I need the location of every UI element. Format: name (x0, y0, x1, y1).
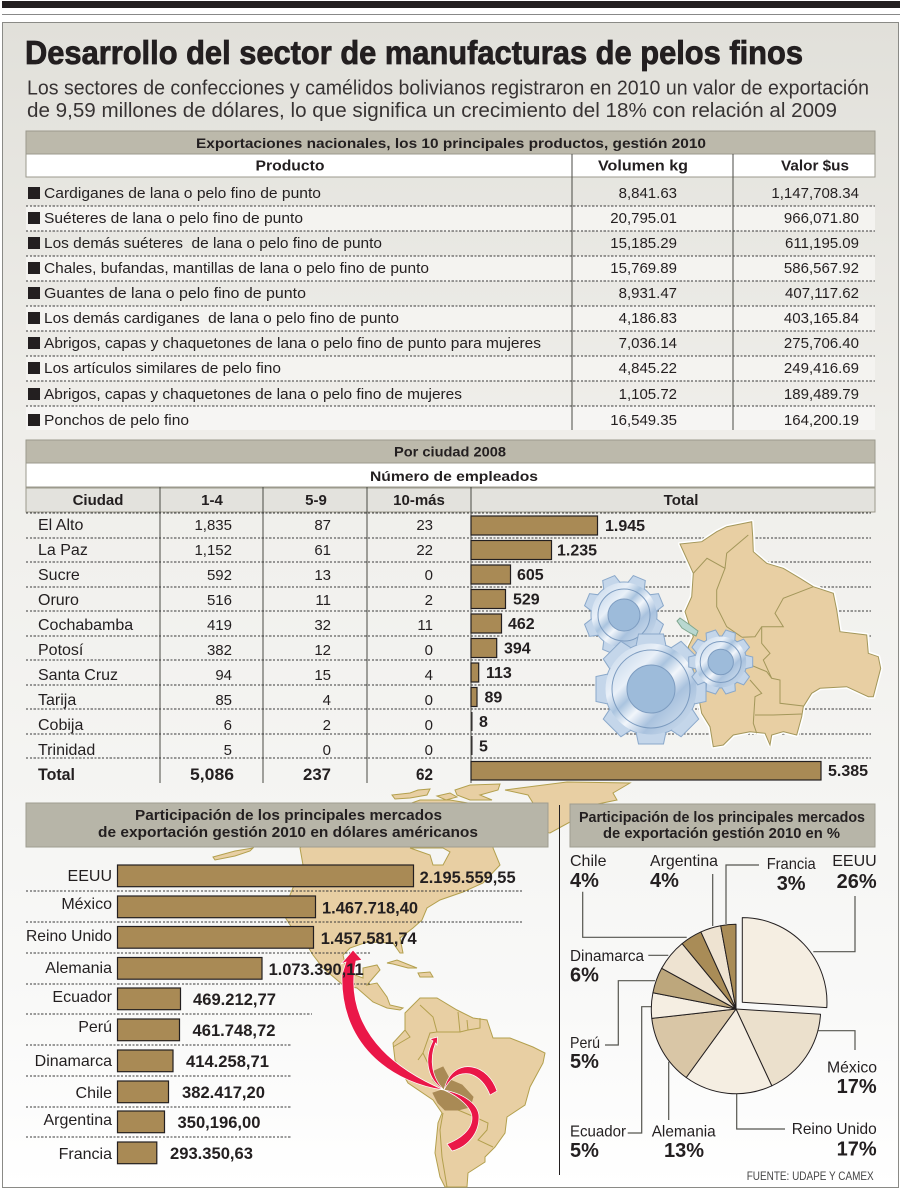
bar: Cochabamba (471, 614, 535, 633)
leader lines (583, 865, 855, 1133)
row 7: 7,036.14 (619, 335, 677, 352)
bar: Francia: 293.350,63 (170, 1145, 253, 1163)
row: Cochabamba: 11 (417, 617, 433, 634)
heading: percent: Participación de los principales mercados (579, 810, 865, 826)
heading: dollars: Participación de los principales mercados (135, 808, 442, 824)
label: Perú (570, 1035, 600, 1073)
bar: Alemania: Alemania (45, 960, 112, 977)
bar: EEUU: EEUU (68, 868, 112, 885)
pie chart (651, 918, 827, 1094)
bar: Perú: 461.748,72 (192, 1022, 276, 1040)
subtitle: Los sectores de confecciones y camélidos bolivianos registraron en 2010 un valor de exportación (27, 76, 869, 100)
row: La Paz: La Paz (38, 542, 88, 559)
bar: El Alto: 1.945 (605, 518, 645, 535)
row: La Paz: 61 (314, 542, 331, 559)
bar: Reino Unido: Reino Unido (26, 928, 112, 945)
row: Oruro: 516 (207, 592, 232, 609)
bar: El Alto (471, 516, 645, 535)
row 1: Cardiganes de lana o pelo fino de punto (44, 185, 321, 202)
row: Cobija: Cobija (38, 717, 83, 734)
row: Cochabamba: 419 (207, 617, 232, 634)
bar: Cobija (472, 712, 488, 731)
label: Chile: 4% (570, 870, 599, 892)
bar: Oruro (471, 590, 540, 608)
row: El Alto: El Alto (38, 517, 83, 534)
row: Trinidad: 0 (425, 742, 433, 759)
row: La Paz: 22 (416, 542, 433, 559)
label: Reino Unido: Reino Unido (792, 1121, 877, 1138)
bar: Chile: 382.417,20 (182, 1084, 265, 1102)
bar: Argentina: Argentina (44, 1112, 112, 1129)
bar: Perú (78, 1019, 276, 1041)
row 3: 611,195.09 (785, 235, 859, 252)
bar: Total (471, 762, 868, 780)
row: Cobija: 0 (425, 717, 433, 734)
table heading (26, 131, 875, 154)
row: Total: 62 (416, 766, 433, 784)
row 9: Abrigos, capas y chaquetones de lana o pelo fino de mujeres (44, 386, 462, 403)
row: Sucre: 0 (425, 567, 433, 584)
label: Dinamarca: 6% (570, 965, 599, 987)
bar: Sucre: 605 (517, 567, 544, 584)
row: Cochabamba: 32 (314, 617, 331, 634)
row 1: 8,841.63 (619, 185, 677, 202)
icon: gear top left (584, 575, 664, 655)
table column header: Valor $us (781, 158, 849, 174)
bar: Ecuador: Ecuador (52, 989, 113, 1006)
label: Argentina: Argentina (650, 853, 718, 870)
label: EEUU: 26% (837, 871, 877, 893)
subtitle (27, 76, 869, 122)
bar: Santa Cruz: 113 (486, 665, 512, 682)
bar: EEUU (68, 865, 516, 887)
bar: México (61, 896, 418, 918)
label: Ecuador: 5% (570, 1140, 599, 1162)
row: El Alto (38, 517, 433, 534)
bar: Tarija: 89 (484, 690, 502, 706)
bar: Trinidad (472, 736, 488, 756)
column header: 1-4 (201, 492, 223, 509)
row: Total: 5,086 (190, 766, 234, 784)
table column header: Volumen kg (598, 158, 688, 174)
row 1: 1,147,708.34 (771, 185, 859, 202)
row: Tarija: 4 (323, 692, 331, 709)
bar: Potosí (471, 638, 531, 658)
row: Trinidad: 5 (224, 742, 232, 759)
row 8: Los artículos similares de pelo fino (44, 360, 281, 377)
map: the Americas (213, 782, 630, 1187)
row: Potosí: 12 (314, 642, 331, 659)
row: Tarija: Tarija (38, 692, 76, 709)
label: Francia: Francia (767, 856, 816, 873)
heading: dollars (26, 803, 548, 847)
row: Oruro: Oruro (38, 592, 79, 609)
row: Oruro (38, 592, 433, 609)
label: Argentina (650, 853, 718, 892)
label: Argentina: 4% (650, 870, 679, 892)
source note: FUENTE: UDAPE Y CAMEX (747, 1171, 874, 1183)
row: Trinidad: 0 (323, 742, 331, 759)
bar: La Paz (471, 540, 597, 560)
row: Sucre: 13 (314, 567, 331, 584)
row: Total (38, 766, 433, 784)
bar: Francia (59, 1142, 253, 1164)
bar: México: 1.467.718,40 (322, 900, 418, 918)
row 5: 8,931.47 (619, 285, 677, 302)
row: La Paz (38, 542, 433, 559)
row 9: 189,489.79 (784, 386, 859, 403)
row: El Alto: 23 (416, 517, 433, 534)
bar: Sucre (471, 565, 544, 584)
bar: Reino Unido: 1.457.581,74 (321, 930, 418, 948)
label: Reino Unido: 17% (837, 1139, 877, 1161)
table heading: Exportaciones nacionales, los 10 principales productos, gestión 2010 (196, 135, 706, 151)
heading: percent: de exportación gestión 2010 en % (603, 826, 840, 842)
row: Trinidad (38, 742, 433, 759)
row 6: 4,186.83 (619, 310, 677, 327)
row 10 (28, 412, 859, 429)
row 10: 16,549.35 (610, 412, 677, 429)
heading: por ciudad: Por ciudad 2008 (394, 444, 506, 460)
row 6 (28, 310, 859, 327)
row: Tarija: 85 (215, 692, 232, 709)
row: Sucre: 592 (207, 567, 232, 584)
label: Dinamarca: Dinamarca (570, 948, 644, 965)
row: Sucre: Sucre (38, 567, 80, 584)
column header: 5-9 (305, 492, 327, 509)
row: Cochabamba: Cochabamba (38, 617, 133, 634)
row: Santa Cruz (38, 667, 433, 684)
row 7: 275,706.40 (784, 335, 859, 352)
label: Francia: 3% (777, 873, 806, 895)
row: Sucre (38, 567, 433, 584)
bar: Dinamarca (35, 1050, 269, 1072)
row 2: 20,795.01 (610, 210, 677, 227)
row 2: Suéteres de lana o pelo fino de punto (44, 210, 303, 227)
row: Potosí (38, 642, 433, 659)
row 4 (28, 260, 859, 277)
label: EEUU (832, 853, 877, 893)
row: La Paz: 1,152 (194, 542, 232, 559)
label: Chile: Chile (570, 853, 607, 870)
row 7 (28, 335, 859, 352)
arrows: exports from Bolivia (341, 950, 497, 1151)
subtitle: de 9,59 millones de dólares, lo que significa un crecimiento del 18% con relación al 2009 (27, 99, 837, 122)
row 7: Abrigos, capas y chaquetones de lana o pelo fino de punto para mujeres (44, 335, 541, 352)
row 4: Chales, bufandas, mantillas de lana o pelo fino de punto (44, 260, 429, 277)
row: Potosí: 0 (425, 642, 433, 659)
row 4: 15,769.89 (610, 260, 677, 277)
bar: Cobija: 8 (479, 714, 488, 731)
bar: Perú: Perú (78, 1019, 112, 1036)
row 6: 403,165.84 (784, 310, 859, 327)
row: Trinidad: Trinidad (38, 742, 95, 759)
bar: Argentina (44, 1111, 260, 1133)
row 8: 4,845.22 (619, 360, 677, 377)
row 8: 249,416.69 (784, 360, 859, 377)
label: EEUU: EEUU (832, 853, 877, 870)
label: Ecuador (570, 1124, 627, 1162)
column header: 10-más (393, 492, 445, 509)
row: Santa Cruz: Santa Cruz (38, 667, 118, 684)
bar: Chile: Chile (76, 1085, 112, 1102)
bar: Chile (76, 1081, 265, 1103)
label: Reino Unido (792, 1121, 877, 1161)
row: Cobija (38, 717, 433, 734)
bar: La Paz: 1.235 (557, 542, 597, 560)
label: México (827, 1060, 877, 1098)
row 10: Ponchos de pelo fino (44, 412, 189, 429)
bar: Dinamarca: 414.258,71 (186, 1053, 269, 1071)
label: Alemania: Alemania (652, 1124, 716, 1141)
bar: Santa Cruz (471, 663, 512, 682)
bar: Oruro: 529 (513, 592, 540, 608)
label: Perú: Perú (570, 1035, 600, 1052)
heading: dollars: de exportación gestión 2010 en dólares américanos (98, 825, 478, 841)
label: México: 17% (837, 1076, 877, 1098)
column header: Ciudad (73, 492, 123, 509)
table column header (26, 154, 875, 177)
row: Tarija (38, 692, 433, 709)
row 2 (28, 210, 859, 227)
row 3: Los demás suéteres de lana o pelo fino de punto (44, 235, 382, 252)
heading: por ciudad (26, 440, 875, 463)
row 3: 15,185.29 (610, 235, 677, 252)
bar: Cochabamba: 462 (508, 616, 535, 633)
row: Tarija: 0 (425, 692, 433, 709)
bar: Trinidad: 5 (479, 738, 488, 756)
row 1 (28, 185, 859, 202)
bar: Alemania: 1.073.390,11 (269, 961, 364, 979)
row: Potosí: Potosí (38, 642, 84, 659)
row 9 (28, 386, 859, 403)
icon: gear small (689, 629, 753, 695)
row 5: Guantes de lana o pelo fino de punto (44, 285, 306, 302)
row 2: 966,071.80 (784, 210, 859, 227)
label: Chile (570, 853, 607, 892)
row: Cobija: 2 (323, 717, 331, 734)
subheading: empleados (26, 463, 875, 487)
row 5: 407,117.62 (785, 285, 859, 302)
bar: Tarija (471, 688, 502, 706)
label: Ecuador: Ecuador (570, 1124, 627, 1141)
row: Total: 237 (303, 766, 331, 784)
bar chart: total by city (471, 516, 868, 780)
heading: percent (570, 804, 875, 847)
title: Desarrollo del sector de manufacturas de pelos finos (25, 34, 803, 71)
map: Bolivia (677, 522, 881, 747)
row 3 (28, 235, 859, 252)
bar: Ecuador (52, 988, 276, 1010)
row 10: 164,200.19 (784, 412, 859, 429)
bar: Total: 5.385 (828, 763, 868, 780)
column header (26, 488, 875, 512)
subheading: empleados: Número de empleados (370, 468, 538, 484)
row: Santa Cruz: 15 (314, 667, 331, 684)
top black bar (2, 1, 900, 8)
row: Cochabamba (38, 617, 433, 634)
panel: employees by city table (26, 440, 875, 784)
bar: Ecuador: 469.212,77 (193, 991, 276, 1009)
label: Francia (767, 856, 816, 895)
row 8 (28, 360, 859, 377)
row 4: 586,567.92 (784, 260, 859, 277)
row: Total: Total (38, 766, 75, 784)
row 6: Los demás cardiganes de lana o pelo fino de punto (44, 310, 399, 327)
icon: gear large (596, 634, 706, 744)
row: El Alto: 1,835 (194, 517, 232, 534)
row: Oruro: 2 (425, 592, 433, 609)
row 5 (28, 285, 859, 302)
column header: Total (664, 492, 698, 509)
table column header: Producto (256, 158, 324, 174)
label: Alemania: 13% (664, 1140, 704, 1162)
bar: EEUU: 2.195.559,55 (420, 869, 516, 887)
bar: Dinamarca: Dinamarca (35, 1053, 112, 1070)
row: El Alto: 87 (314, 517, 331, 534)
bar: Alemania (45, 958, 364, 979)
label: México: México (827, 1060, 877, 1077)
panel: markets in percent (570, 804, 877, 1162)
label: Perú: 5% (570, 1051, 599, 1073)
row 9: 1,105.72 (619, 386, 677, 403)
row: Cobija: 6 (224, 717, 232, 734)
bar: México: México (61, 896, 112, 913)
label: Alemania (652, 1124, 716, 1162)
row: Oruro: 11 (315, 592, 331, 609)
bar: Argentina: 350,196,00 (178, 1114, 260, 1132)
bar: Potosí: 394 (504, 640, 531, 658)
label: Dinamarca (570, 948, 644, 987)
bar: Reino Unido (26, 926, 418, 948)
row: Potosí: 382 (207, 642, 232, 659)
bar: Francia: Francia (59, 1146, 112, 1163)
row: Santa Cruz: 4 (425, 667, 433, 684)
row: Santa Cruz: 94 (215, 667, 232, 684)
panel: exports table (26, 131, 875, 430)
panel: markets in dollars (26, 803, 548, 1164)
